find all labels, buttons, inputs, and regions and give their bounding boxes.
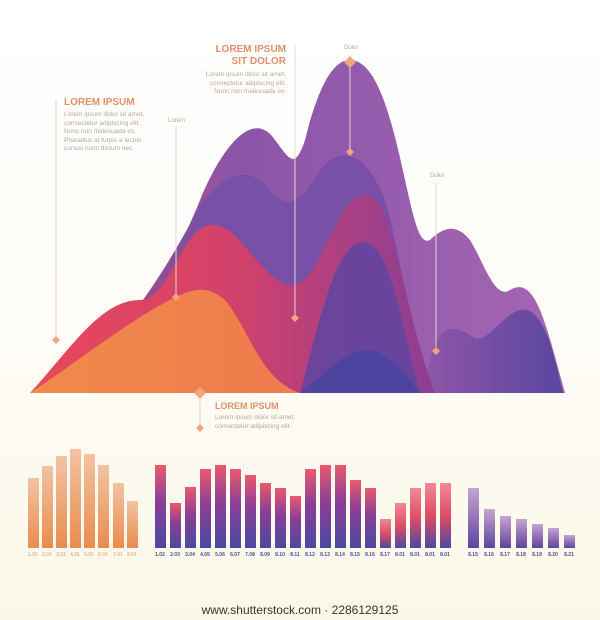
bar chart purple-red (155, 465, 376, 548)
text block bottom (215, 401, 295, 430)
bar labels: 8.01 (127, 552, 137, 558)
bar labels: 8.10 (275, 552, 285, 558)
text block left: Nunc non malesuada ex. (64, 128, 136, 135)
bar labels: 4.01 (70, 552, 80, 558)
text block top (206, 44, 286, 95)
text block top: SIT DOLOR (232, 56, 286, 67)
text block left: LOREM IPSUM (64, 97, 135, 108)
annotation lines and diamonds (52, 45, 440, 432)
text block bottom: LOREM IPSUM (215, 401, 279, 411)
back violet layer (30, 60, 565, 393)
text block left: Phasellus at turpis a lectus (64, 136, 141, 144)
orange layer (30, 290, 300, 393)
bar labels: 8.16 (484, 552, 494, 558)
bar labels: 8.21 (564, 552, 574, 558)
bar labels: 8.15 (350, 552, 360, 558)
bar labels: 8.01 (410, 552, 420, 558)
bar labels: 8.09 (260, 552, 270, 558)
small labels (168, 45, 444, 179)
bar labels: 7.01 (113, 552, 123, 558)
text block left: cursus nunc dictum nec. (64, 145, 134, 152)
magenta layer (30, 195, 435, 393)
bar labels: 5.01 (84, 552, 94, 558)
bar labels: 3.04 (185, 552, 195, 558)
mid violet layer (60, 155, 425, 393)
bar labels: 8.01 (440, 552, 450, 558)
bar labels: 6.07 (230, 552, 240, 558)
bar labels: 5.06 (215, 552, 225, 558)
bar labels: 8.12 (305, 552, 315, 558)
bar labels: 8.17 (500, 552, 510, 558)
bar chart orange (28, 449, 138, 548)
text block top: LOREM IPSUM (215, 44, 286, 55)
bar labels: 2.03 (170, 552, 180, 558)
bar labels: 8.11 (290, 552, 300, 558)
bar labels: 7.08 (245, 552, 255, 558)
bottom blue bump (300, 350, 420, 393)
bar labels: 8.13 (320, 552, 330, 558)
bar labels: 1.01 (28, 552, 38, 558)
text block left: Lorem ipsum dolor sit amet, (64, 111, 144, 118)
bar labels: 6.01 (98, 552, 108, 558)
bar labels: 8.18 (516, 552, 526, 558)
footer: www.shutterstock.com · 2286129125 (201, 603, 399, 617)
bar labels: 8.20 (548, 552, 558, 558)
text block top: consectetur adipiscing elit. (210, 80, 286, 86)
small labels: Lorem (168, 118, 185, 124)
small labels: Dolor (344, 45, 358, 51)
bar labels: 8.19 (532, 552, 542, 558)
text block left: consectetur adipiscing elit. (64, 120, 140, 126)
bar labels: 2.01 (42, 552, 52, 558)
text block bottom: Lorem ipsum dolor sit amet, (215, 414, 295, 421)
bar labels: 8.15 (468, 552, 478, 558)
text block left (64, 97, 144, 152)
bar chart lilac (468, 488, 575, 548)
right dark layer (425, 310, 563, 393)
bar labels: 4.05 (200, 552, 210, 558)
text block top: Lorem ipsum dolor sit amet, (206, 71, 286, 78)
bar labels: 8.16 (365, 552, 375, 558)
bar labels: 8.01 (425, 552, 435, 558)
small labels: Dolor (430, 173, 444, 179)
text block top: Nunc non malesuada ex. (214, 88, 286, 95)
bar labels: 8.01 (395, 552, 405, 558)
text block bottom: consectetur adipiscing elit. (215, 422, 291, 430)
bar labels: 1.02 (155, 552, 165, 558)
inner dark layer (300, 242, 420, 393)
bar labels: 8.14 (335, 552, 345, 558)
bar labels: 3.01 (56, 552, 66, 558)
bar labels (28, 552, 574, 558)
bar labels: 8.17 (380, 552, 390, 558)
